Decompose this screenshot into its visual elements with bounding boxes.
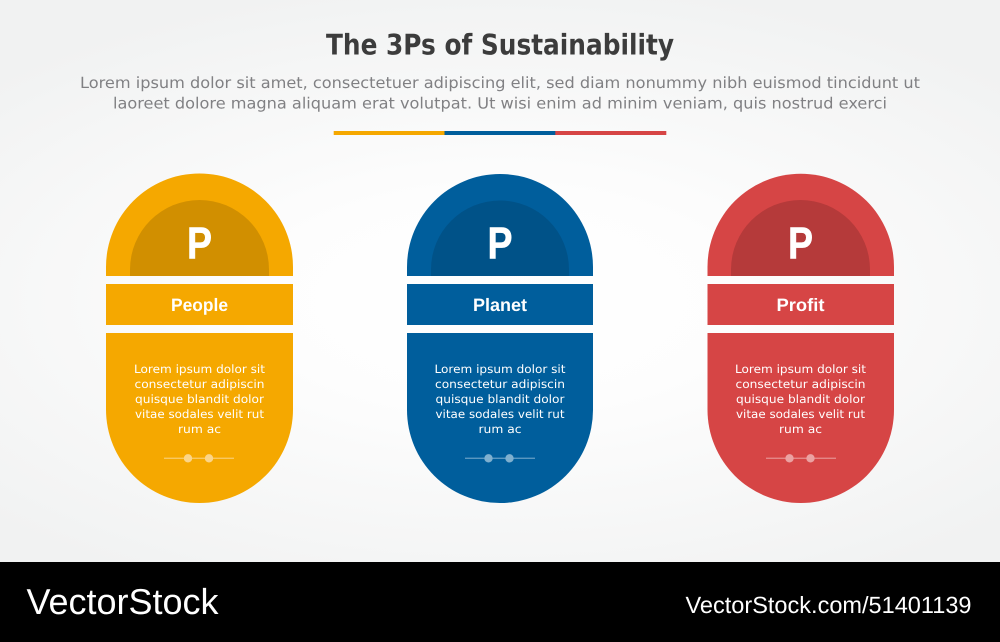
panel: profit: [708, 174, 894, 503]
planet label bar: [407, 284, 593, 325]
profit letter: P: [788, 218, 813, 269]
profit label: Profit: [776, 295, 825, 315]
footer logo text: VectorStock: [26, 581, 219, 622]
footer image id: VectorStock.com/51401139: [686, 592, 972, 618]
profit dots ornament: [766, 454, 836, 462]
footer bar: [0, 562, 1000, 642]
people body text: vitae sodales velit rut: [135, 407, 265, 421]
subtitle text: [80, 74, 920, 112]
profit label bar: [708, 284, 894, 325]
profit body text: rum ac: [779, 422, 822, 436]
profit body text: consectetur adipiscin: [736, 377, 866, 391]
people body text: rum ac: [178, 422, 221, 436]
profit inner arch: [731, 200, 870, 276]
people lower body: [106, 333, 293, 503]
people body text: quisque blandit dolor: [135, 392, 264, 406]
planet label: Planet: [473, 295, 527, 315]
planet body text: vitae sodales velit rut: [436, 407, 565, 421]
panel: people: [106, 174, 293, 503]
planet dots ornament: [465, 454, 535, 462]
people inner arch: [130, 200, 269, 276]
planet body text: Lorem ipsum dolor sit: [434, 362, 566, 376]
people dots ornament: [164, 454, 234, 462]
tricolor divider: [334, 131, 666, 135]
profit body text: Lorem ipsum dolor sit: [735, 362, 867, 376]
title: The 3Ps of Sustainability: [326, 28, 674, 62]
people body text: Lorem ipsum dolor sit: [134, 362, 266, 376]
profit body text: [735, 362, 867, 436]
profit body text: vitae sodales velit rut: [736, 407, 866, 421]
planet inner arch: [431, 201, 569, 276]
people label: People: [171, 295, 228, 315]
subtitle text: laoreet dolore magna aliquam erat volutpat. Ut wisi enim ad minim veniam, quis nostrud exerci: [113, 94, 887, 112]
profit body text: quisque blandit dolor: [736, 392, 865, 406]
subtitle text: Lorem ipsum dolor sit amet, consectetuer adipiscing elit, sed diam nonummy nibh euismod tincidunt ut: [80, 74, 920, 92]
profit lower body: [708, 333, 894, 503]
planet body text: quisque blandit dolor: [436, 392, 565, 406]
planet body text: rum ac: [478, 422, 522, 436]
planet letter: P: [488, 218, 512, 269]
people body text: consectetur adipiscin: [134, 377, 264, 391]
people top arch: [106, 174, 293, 276]
planet top arch: [407, 174, 593, 276]
people letter: P: [187, 218, 212, 269]
profit top arch: [708, 174, 894, 276]
planet body text: consectetur adipiscin: [435, 377, 565, 391]
planet body text: [434, 362, 566, 436]
people body text: [134, 362, 266, 436]
people label bar: [106, 284, 293, 325]
panel: planet: [407, 174, 593, 503]
planet lower body: [407, 333, 593, 503]
